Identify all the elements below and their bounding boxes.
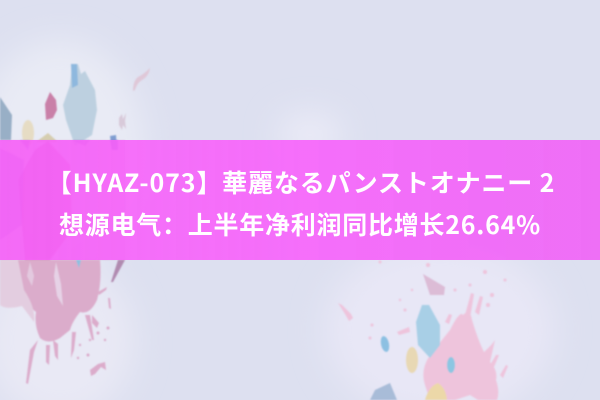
banner underlay shapes <box>0 140 125 260</box>
upper left crystals <box>0 64 150 150</box>
magenta title banner <box>0 140 600 260</box>
title line 1: 【HYAZ-073】華麗なるパンストオナニー 2 <box>47 164 555 200</box>
lower right pink splash <box>338 260 508 400</box>
lower left pink splash <box>0 260 111 384</box>
title line 2: 想源电气：上半年净利润同比增长26.64% <box>59 206 541 242</box>
